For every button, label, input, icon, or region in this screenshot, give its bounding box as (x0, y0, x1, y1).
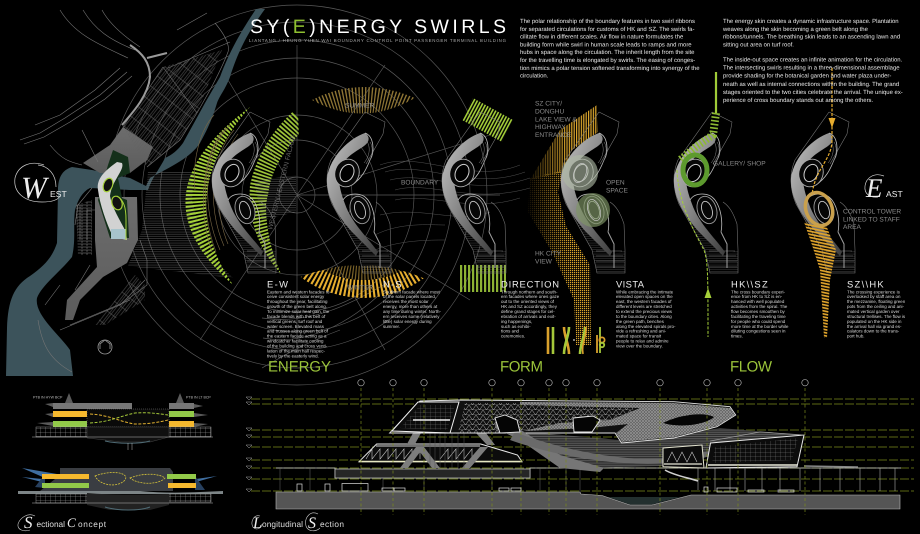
heading: sectional concept: ectional (36, 519, 65, 529)
road and city block linework (20, 10, 230, 372)
column: E-W: ceive consistent solar energy (267, 294, 325, 299)
icon: direction bars (548, 327, 586, 354)
column: SZ to HK: pots from the ceiling and ani- (847, 304, 905, 309)
level markers (246, 397, 252, 492)
column: direction: ebration of arrivals and exit- (501, 314, 556, 319)
roundabout marker (98, 340, 112, 354)
title: SY(E)NERGY SWIRLS (250, 16, 506, 38)
control tower label: AREA (843, 224, 862, 231)
column: N-S: energy, more than others at (383, 304, 438, 309)
podium (276, 468, 901, 492)
column: N-S: ern receives some (relatively (383, 314, 440, 319)
icon: west logo: EST (50, 189, 67, 199)
arrow up (704, 288, 712, 298)
plaza south (65, 197, 138, 320)
text block: polar relationship: building form while swirl in human scale leads to ramps and more (520, 41, 692, 48)
sectional concept: upper diagram: PTB IN LT BCP (186, 396, 211, 400)
column: direction: ceremonies. (501, 334, 525, 339)
column: SZ to HK: SZ\\HK (847, 278, 884, 289)
right terminal block (706, 432, 858, 468)
text block: polar relationship: for separated circulations for customs of HK and SZ. The swirls fa- (520, 26, 694, 33)
column: SZ to HK: The crossing experience is (847, 289, 901, 294)
column: E-W: tively by the easterly wind. (267, 353, 319, 358)
column: N-S: summer. (383, 324, 400, 329)
summer solar fan (312, 87, 414, 114)
column: vista: different levels are stretched (616, 304, 672, 309)
roof dark eye (663, 414, 714, 425)
subtitle: LIANTANG / HEUNG YUEN WAI BOUNDARY CONTROL POINT PASSENGER TERMINAL BUILDING (249, 38, 507, 43)
arrows (37, 393, 208, 427)
green solar fan right (256, 118, 298, 272)
column: vista: to the boundary cities. Along (616, 314, 672, 319)
lower left hall (359, 444, 522, 462)
swirl: solar study east-west (185, 107, 299, 284)
river (6, 9, 265, 376)
main road (122, 45, 167, 125)
column: N-S: Southern facade where most (383, 289, 441, 294)
text block: energy skin: ribbons/tunnels. The breathing skin leads to an ascending lawn and (723, 34, 900, 41)
plaza north (83, 127, 153, 173)
hk city view label: HK CITY (535, 250, 562, 258)
green block north (462, 98, 513, 142)
column: SZ to HK: calators down to the trans- (847, 329, 900, 334)
green block south (459, 265, 506, 292)
green vertical bar (715, 72, 717, 113)
terminal swirl (98, 162, 127, 240)
column: direction: ern facades where ones gaze (501, 294, 560, 299)
text block: polar relationship: hubs in space along the circulation. The inherit length from the site (520, 49, 695, 56)
column: E-W: water screen. Elevated mass (267, 324, 325, 329)
gold stripes (804, 222, 836, 338)
label: HIGHWAY (535, 124, 566, 131)
column: N-S: N-S (383, 278, 402, 289)
fine columns (430, 433, 464, 468)
grid circles (358, 380, 808, 386)
dark striped underbelly (505, 428, 804, 468)
label: SZ CITY/ (535, 100, 562, 108)
column: HK to SZ: more time at the border while (731, 324, 789, 329)
column: vista: view over the boundary. (616, 344, 663, 348)
column: direction: such as exhibi- (501, 324, 531, 329)
level lines (251, 399, 914, 491)
column: E-W: E-W (267, 278, 288, 289)
column: vista: mated space for transit (616, 334, 662, 339)
swirl plan (674, 112, 738, 273)
column: E-W (267, 278, 332, 358)
winter solar fan (300, 265, 424, 298)
heading: longitudinal section (252, 513, 344, 532)
text block: polar relationship: tion mimics a polar tension softened transforming into synergy of the (520, 65, 700, 72)
column: vista: elevated open spaces on the (616, 294, 673, 299)
column: SZ to HK: port hub. (847, 334, 865, 339)
open space disc upper (562, 155, 598, 191)
heading: form: FORM (500, 358, 543, 376)
sectional concept: lower diagram (18, 468, 223, 510)
sweeping ribbon (510, 432, 804, 464)
column: HK to SZ: facilitating the traveling time (731, 314, 786, 319)
column: E-W: vertical greens, turf roof and (267, 319, 323, 324)
column: E-W: facade blends with this belt of (267, 314, 326, 319)
column: vista: along the elevated spirals pro- (616, 324, 676, 329)
column: E-W: throughout the year, facilitating (267, 299, 328, 304)
swirl: hk to sz flow (674, 72, 766, 337)
v columns (400, 433, 495, 468)
south east blocks (95, 275, 145, 325)
column: direction: define grand stages for cel- (501, 309, 555, 314)
column: E-W: lation of the main hall respec- (267, 348, 325, 353)
column: SZ to HK: mated vertical garden over (847, 309, 900, 314)
icon: east logo: AST (886, 189, 903, 199)
column: vista: east, the western facades of (616, 299, 672, 304)
control tower label: CONTROL TOWER (843, 208, 901, 216)
column: HK to SZ: for people who could spend (731, 319, 786, 324)
column: HK to SZ: flow becomes smoothen by (731, 309, 786, 314)
heading: longitudinal section: ection (320, 519, 344, 529)
wind contour lines (375, 161, 530, 250)
column: E-W: Eastern and western facades re- (267, 289, 332, 294)
column: SZ to HK: structural trellises. The flow is (847, 314, 906, 319)
column: N-S: any time during winter. North- (383, 309, 441, 314)
column: vista: vide a refreshing and ani- (616, 329, 667, 334)
column: SZ to HK: the arrival hall via grand es- (847, 324, 902, 329)
gray ribbon (495, 418, 604, 472)
icon: east logo (865, 173, 903, 203)
text block: energy skin: The energy skin creates a dynamic infrastructure space. Plantation (723, 18, 899, 25)
text block: polar relationship: for the travelling time is elongated by swirls. The easing of conges- (520, 57, 695, 64)
column: vista: the green path, benches (616, 319, 665, 324)
roof lattice (458, 403, 640, 433)
column: vista: VISTA (616, 278, 645, 289)
right hall (663, 445, 704, 481)
swirl: direction study (442, 98, 513, 292)
green flow path (677, 170, 708, 337)
gold ring (801, 188, 837, 230)
open space label: OPEN (606, 180, 625, 186)
column: E-W: windcatcher facilitate cooling (267, 338, 324, 344)
swirl plan (561, 112, 625, 273)
polar diagram rings and rays (107, 5, 500, 385)
column: N-S: receives the most solar (383, 299, 429, 304)
column: vista: people to relax and admire (616, 338, 669, 344)
column: SZ to HK: overlooked by staff area on (847, 294, 901, 299)
column: E-W: the eastern facade acting as a (267, 334, 327, 339)
column: HK to SZ: times. (731, 334, 743, 339)
heading: longitudinal section: ongitudinal (262, 519, 303, 529)
column: SZ to HK: the mezzanine, floating green (847, 299, 906, 304)
gold flow path (812, 68, 832, 195)
open space label: SPACE (606, 188, 628, 194)
swirl: vista study (528, 100, 628, 345)
column: HK to SZ: HK\\SZ (731, 278, 768, 289)
icon: vista key (597, 327, 605, 353)
winter label: WINTER (347, 284, 373, 292)
text block: energy skin: provide shading for the botanical garden and water plaza under- (723, 73, 891, 80)
text block: polar relationship: The polar relationship of the boundary features in two swirl ribbons (520, 18, 695, 25)
swirl: sz to hk flow (791, 68, 901, 338)
swirl plan (791, 112, 855, 273)
open space disc lower (576, 193, 610, 227)
icon: west logo (15, 163, 67, 205)
longitudinal section (246, 380, 914, 515)
brown centre wedge (254, 175, 296, 220)
ground slab (276, 492, 900, 509)
boundary label: BOUNDARY (401, 180, 439, 186)
left glazed tower (392, 402, 459, 433)
box windows (495, 415, 600, 433)
label: LAKE VIEW & (535, 116, 577, 123)
swirl plan (442, 112, 506, 273)
column: vista: to extend the precious views (616, 309, 673, 314)
heading: energy: ENERGY (268, 358, 331, 376)
curl overlay (571, 162, 603, 222)
roof speckled right shell (520, 402, 735, 442)
green solar fan left (185, 107, 250, 284)
column: direction (501, 278, 560, 339)
column: direction: Through northern and south- (501, 289, 558, 294)
column: HK to SZ: diluting congestions seen in (731, 329, 786, 334)
column: HK to SZ: The cross boundary experi- (731, 289, 786, 294)
column: N-S (383, 278, 442, 329)
vertical note: WESTERN / EASTERN FACADE (267, 133, 298, 230)
heading: sectional concept (18, 513, 107, 532)
gold view fan (528, 105, 598, 345)
control tower label: LINKED TO STAFF (843, 216, 900, 224)
column: direction: HK and SZ accordingly, they (501, 304, 558, 309)
green ring (683, 155, 707, 185)
landscaped green patch (98, 150, 130, 238)
column: direction: ing happenings, (501, 319, 532, 324)
text block: polar relationship: circulation. (520, 73, 549, 80)
column: N-S: little) solar energy during (383, 319, 432, 324)
column: vista (616, 278, 677, 348)
column: direction: DIRECTION (501, 278, 559, 289)
green chevrons (680, 113, 716, 160)
text block: polar relationship: cilitate flow in different scales. Air flow in nature formulates the (520, 34, 684, 41)
column: vista: While embracing the intimate (616, 289, 674, 294)
text block: energy skin: sitting out area on turf roof. (723, 41, 794, 48)
arrow down (828, 118, 836, 128)
text block: energy skin: perience of cross boundary stands out among the others. (723, 97, 874, 104)
heading: flow: FLOW (730, 358, 773, 376)
column: N-S: of the solar panels located, (383, 294, 436, 299)
roof body (390, 400, 736, 443)
column: E-W: growth of the green belt along. (267, 304, 327, 309)
heading: sectional concept: C (67, 515, 76, 530)
swirl: solar study north-south (300, 87, 438, 298)
column: HK to SZ: hanced with well populated (731, 299, 785, 304)
column: direction: tions and (501, 329, 520, 334)
summer label: SUMMER (345, 102, 375, 110)
site plan (6, 9, 265, 376)
tower slab (413, 419, 450, 421)
brown lines (194, 115, 238, 252)
text block: energy skin: The intersecting swirls resulting in a three-dimensional assemblage (723, 65, 900, 72)
swirl plan (327, 112, 391, 273)
column: E-W: of the building and cross venti- (267, 344, 328, 348)
tower mesh (400, 405, 455, 430)
gallery label: GALLERY/ SHOP (713, 160, 766, 168)
hk city view label: VIEW (535, 258, 553, 265)
south city blocks (76, 200, 92, 255)
text block: energy skin: stages oriented to the two cities celebrate the arrival. The unique ex- (723, 89, 903, 96)
text block: energy skin: weaves along the skin becoming a green belt along the (722, 26, 869, 33)
label: DONGHU (535, 108, 565, 115)
column: SZ to HK (847, 278, 906, 339)
heading: longitudinal section: L (252, 515, 262, 532)
column: HK to SZ: ence from HK to SZ is en- (731, 294, 783, 299)
text block: energy skin: The inside-out space creates an infinite animation for the circulation. (723, 56, 903, 64)
sectional concept: upper diagram: PTB IN HYW BCP (33, 396, 63, 400)
water channel (608, 497, 680, 504)
heading: sectional concept: oncept (78, 519, 107, 529)
heading: sectional concept: S (24, 513, 33, 532)
text block: energy skin: neath as well as internal connections within the building. The grand (723, 81, 899, 88)
column: E-W: To minimize solar heat gain, the (267, 309, 330, 314)
heading: longitudinal section: S (308, 515, 316, 532)
icon: east logo: E (865, 173, 883, 203)
column: direction: out to the oriented views of (501, 299, 555, 304)
grid verticals (361, 388, 805, 515)
column: HK to SZ: activities from the spiral. The (731, 304, 788, 309)
swirl plan (212, 112, 276, 273)
column: E-W: and trusses along green belt of (267, 329, 329, 334)
sectional concept: upper diagram (32, 393, 213, 450)
icon: west logo: W (21, 170, 50, 205)
column: SZ to HK: populated on the HK side in (847, 319, 902, 324)
column: HK to SZ (731, 278, 790, 339)
site fan lines (128, 172, 233, 278)
north city blocks (123, 50, 222, 167)
vehicles (297, 484, 794, 492)
label: ENTRANCE (535, 132, 572, 139)
